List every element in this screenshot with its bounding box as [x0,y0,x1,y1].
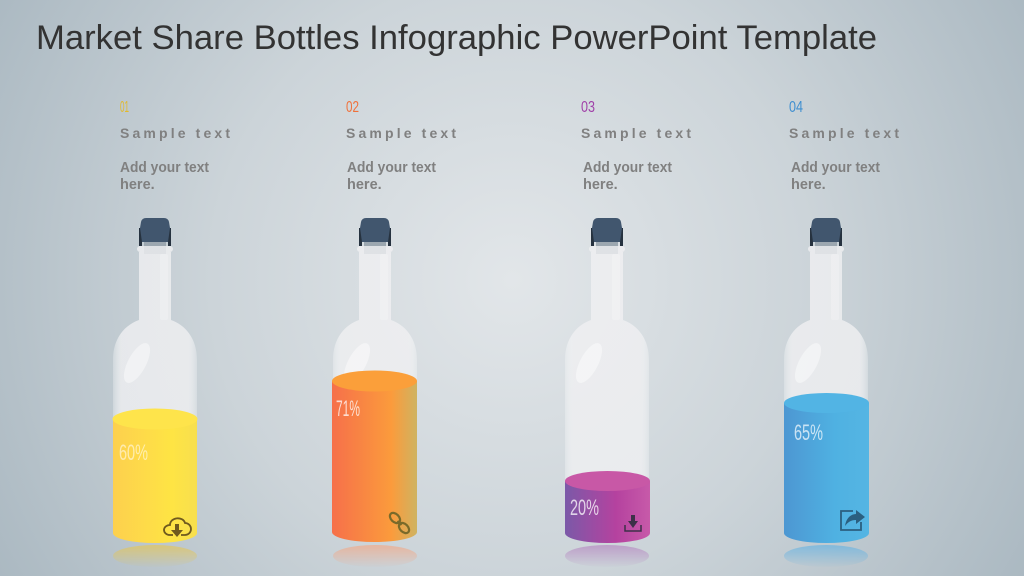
cork [359,218,391,254]
glass body [565,246,649,540]
number 03: 03 [581,99,595,116]
cork [810,218,842,254]
reflection [784,545,868,567]
liquid [565,481,650,543]
bottle 3: purple 20% [565,218,650,567]
column 2 text [346,99,456,193]
bottle 1: yellow 60% [112,218,198,567]
number 01: 01 [120,99,129,116]
reflection [565,545,649,564]
cork [139,218,171,254]
liquid [784,403,869,543]
liquid [332,381,417,542]
subheading 2: Sample text [346,125,456,141]
title: Market Share Bottles Infographic PowerPoint Template [36,19,877,57]
glass body [784,246,868,540]
bottle 4: blue 65% [784,218,869,567]
icon: chain link [388,511,411,535]
icon: cloud download [164,518,191,537]
description 3: Add your text [583,160,672,176]
number 04: 04 [789,99,803,116]
reflection [333,545,417,567]
value: 65% [794,420,823,445]
number 02: 02 [346,99,359,116]
liquid top [112,408,198,430]
description 2: here. [347,177,382,193]
description 2: Add your text [347,160,436,176]
liquid top [332,370,417,392]
description 3: here. [583,177,618,193]
reflection [113,545,197,567]
highlights [571,254,620,387]
subheading 3: Sample text [581,125,691,141]
liquid [113,419,197,543]
value: 20% [570,495,599,520]
glass body [113,246,197,540]
description 1: Add your text [120,160,209,176]
highlights [119,254,168,387]
cork [591,218,623,254]
subheading 4: Sample text [789,125,899,141]
column 4 text [789,99,899,193]
highlights [790,254,839,387]
bottle 2: orange 71% [332,218,417,567]
highlights [339,254,388,387]
icon: download tray [625,515,641,531]
description 4: Add your text [791,160,880,176]
column 3 text [581,99,691,193]
subheading 1: Sample text [120,125,230,141]
glass body [333,246,417,540]
description 1: here. [120,177,155,193]
value: 71% [336,396,360,421]
value: 60% [119,440,148,465]
description 4: here. [791,177,826,193]
icon: share box [841,510,865,530]
column 1 text [120,99,230,193]
liquid top [565,471,650,491]
liquid top [784,393,869,413]
